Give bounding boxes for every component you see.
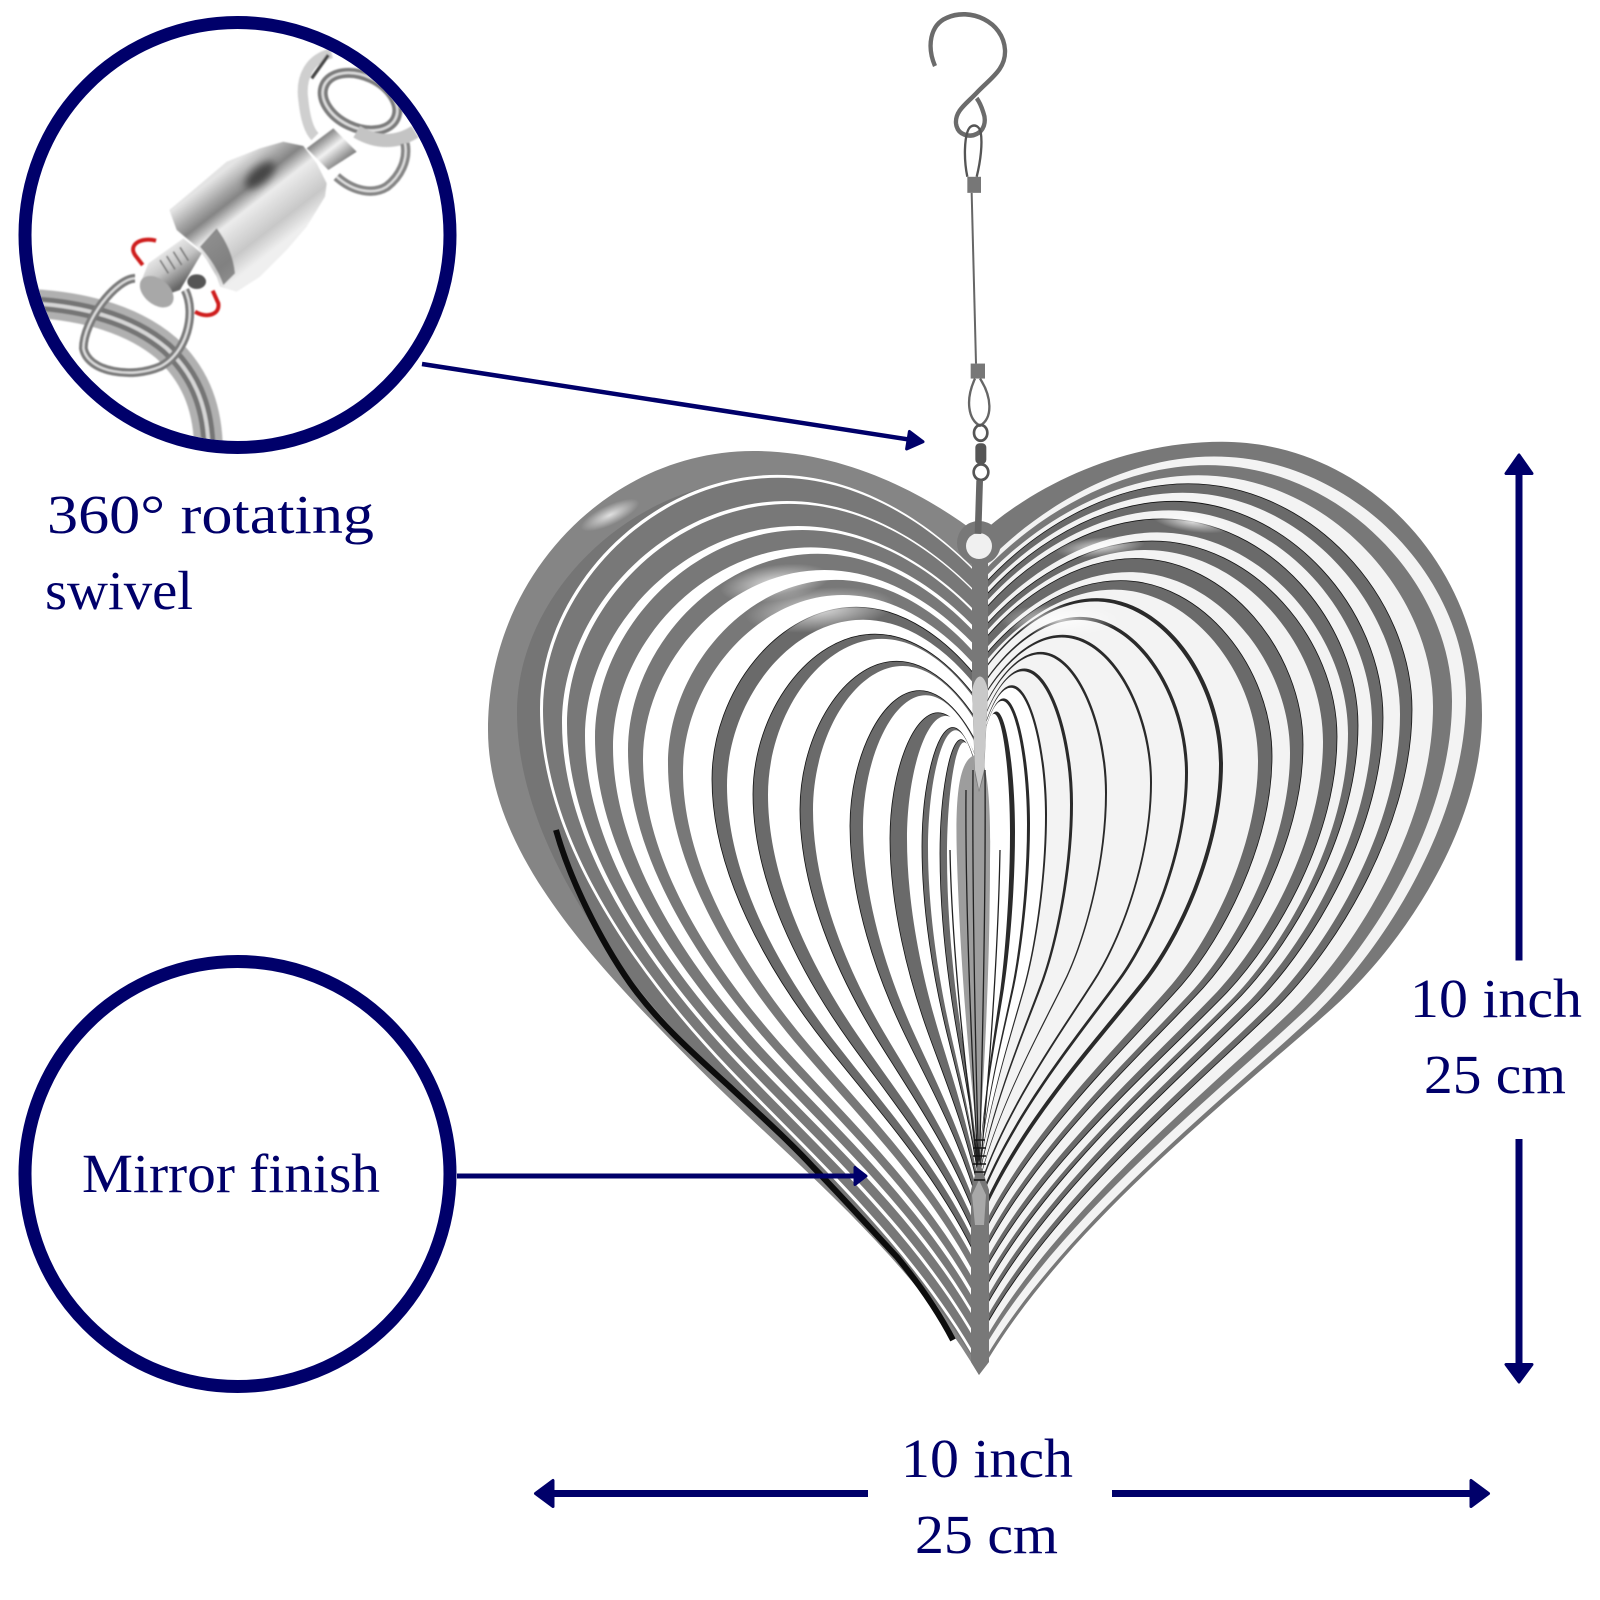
- upper split rings: [313, 61, 415, 191]
- s-hook: [931, 14, 1005, 136]
- height label: [1410, 968, 1582, 1105]
- small swivel: [974, 425, 988, 480]
- converging lines at centre: [950, 770, 1000, 1180]
- red rotation arrows: [133, 240, 218, 315]
- steel wire: [972, 193, 976, 364]
- hole inside small split ring: [95, 337, 137, 367]
- bolt ball end: [139, 276, 174, 308]
- reflective bottom spine section: [972, 1180, 986, 1225]
- horizontal dimension: [536, 1428, 1488, 1565]
- width label: 25 cm: [915, 1504, 1058, 1565]
- left arrow: [536, 1480, 868, 1506]
- small split ring: [83, 278, 190, 373]
- mirror reflection along lower left edge: [556, 830, 953, 1340]
- reflective spine section: [972, 676, 988, 790]
- callout circle: swivel: [25, 22, 450, 448]
- clip rod: [978, 480, 980, 534]
- top spine: [972, 530, 988, 792]
- swivel neck: [307, 128, 357, 170]
- swivel caption: swivel: [45, 560, 193, 621]
- swivel photo illustration: [33, 53, 415, 443]
- lower arrow: [1506, 1139, 1532, 1382]
- right arrow: [1112, 1480, 1488, 1506]
- width label: 10 inch: [901, 1428, 1073, 1489]
- arrow from mirror callout to heart: [457, 1168, 866, 1184]
- width label: [901, 1428, 1073, 1565]
- hanging tab: [957, 521, 1001, 565]
- swivel caption: 360° rotating: [47, 484, 374, 545]
- hanging hook and wire: [931, 14, 1005, 534]
- bolt threads: [160, 247, 188, 273]
- circle outline: [25, 22, 450, 448]
- crumpled lower convergence: [973, 1140, 986, 1180]
- height label: 10 inch: [1410, 968, 1582, 1029]
- threaded bolt: [142, 238, 202, 297]
- upper ferrule: [967, 177, 981, 193]
- upper clip: [303, 53, 332, 137]
- swivel barrel: [169, 142, 327, 292]
- dark eye of bolt: [187, 274, 206, 289]
- arrow from swivel callout to chain: [422, 364, 923, 449]
- hanging hole: [966, 533, 992, 559]
- barrel dark reflection: [241, 157, 279, 193]
- vertical dimension: [1410, 455, 1582, 1382]
- height label: 25 cm: [1424, 1044, 1566, 1105]
- left half of spinner rings: [488, 451, 979, 1375]
- upper arrow: [1506, 455, 1532, 960]
- bottom spine: [971, 1160, 989, 1375]
- right half of spinner rings: [979, 442, 1482, 1375]
- top wire loop: [965, 125, 981, 177]
- centre of spinner: [956, 755, 990, 1150]
- barrel collar shading: [200, 228, 235, 285]
- heart wind spinner: [488, 442, 1482, 1375]
- callout circle: mirror finish: [25, 962, 450, 1386]
- lower wire loop: [969, 379, 989, 426]
- callout circle: mirror finish: Mirror finish: [82, 1143, 380, 1204]
- lower ferrule: [971, 364, 985, 379]
- large key ring: [33, 303, 208, 443]
- light reflections on rings: [577, 492, 1233, 638]
- swivel caption: [45, 484, 374, 621]
